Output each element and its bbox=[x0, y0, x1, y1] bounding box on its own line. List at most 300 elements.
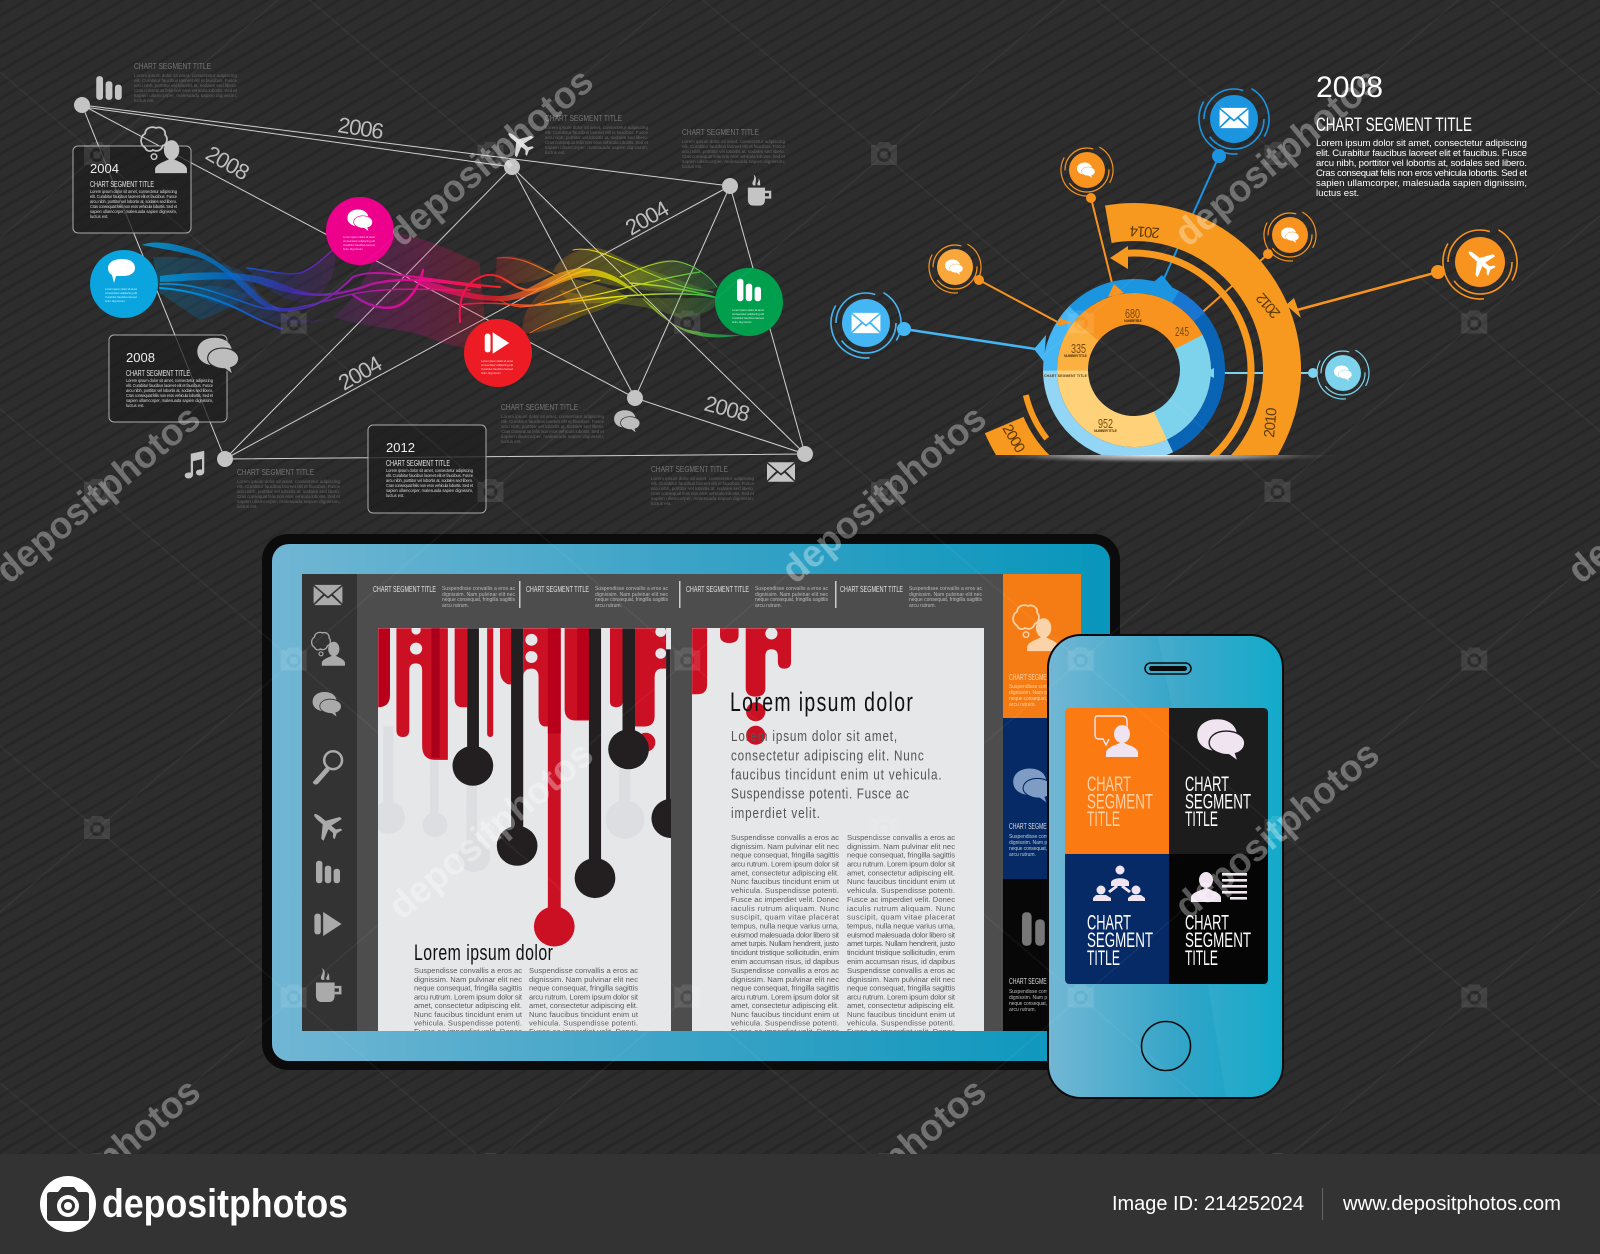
phone tile: orange: SEGMENT bbox=[1087, 791, 1153, 814]
tablet screen bbox=[302, 574, 1081, 1031]
donut value labels: 952 bbox=[1098, 416, 1113, 431]
tablet right strip: navy: CHART SEGMENT TITLE bbox=[1009, 822, 1069, 831]
page right body column two: tincidunt tristique sollicitudin, enim bbox=[847, 948, 955, 957]
icon: person with cloud bbox=[1013, 605, 1059, 651]
icon: coffee cup bbox=[748, 174, 771, 206]
phone tile: navy bbox=[1065, 854, 1169, 984]
text block: bottom left: Lorem ipsum dolor sit amet, consectetur adipiscing bbox=[237, 479, 340, 484]
icon: search bbox=[313, 750, 343, 785]
watermark overlay: depositphotos bbox=[381, 733, 602, 928]
text box: 2004: Cras consequat felis non eros vehicula lobortis. Sed et bbox=[90, 204, 178, 209]
phone gloss bbox=[1158, 636, 1282, 1097]
text box: 2012: 2012 bbox=[386, 440, 415, 455]
text block: upper right: CHART SEGMENT TITLE bbox=[682, 128, 759, 137]
text block: bottom left: CHART SEGMENT TITLE bbox=[237, 468, 314, 477]
text block: bottom right: Cras consequat felis non eros vehicula lobortis. Sed et bbox=[651, 491, 755, 496]
text block: top left: sapien ullamcorper, malesuada sapien dignissim, bbox=[134, 93, 237, 98]
circle: red info bubble bbox=[464, 319, 532, 387]
page left body column one: Fusce ac imperdiet velit. Donec bbox=[414, 1027, 522, 1036]
drip artwork right bbox=[692, 628, 791, 745]
donut value labels: 245 bbox=[1175, 324, 1189, 339]
circle: blue info bubble: felis dignissim bbox=[105, 299, 126, 303]
website url: www.depositphotos.com bbox=[1342, 1193, 1561, 1215]
icon: chat bbox=[1197, 719, 1245, 761]
text block: top left: CHART SEGMENT TITLE bbox=[134, 62, 211, 71]
text box: 2008: Lorem ipsum dolor sit amet, consectetur adipiscing bbox=[126, 378, 214, 383]
chart heading and description bbox=[1316, 71, 1527, 199]
tablet header segments: neque consequat, fringilla sagittis bbox=[595, 597, 668, 603]
tablet right strip: orange: CHART SEGMENT TITLE bbox=[1009, 673, 1069, 682]
phone tile: orange: CHART bbox=[1087, 773, 1131, 796]
magazine page left bbox=[372, 625, 691, 1036]
text box: 2008: arcu nibh, porttitor vel lobortis at, sodales sed libero. bbox=[126, 388, 213, 393]
circle: green info bubble: consectetur adipiscing elit bbox=[732, 312, 764, 316]
donut value labels: 680 bbox=[1125, 306, 1140, 321]
year labels on lines bbox=[202, 112, 753, 427]
text block: upper middle: elit. Curabitur faucibus laoreet elit et faucibus. Fusce bbox=[545, 130, 648, 135]
network connection lines bbox=[82, 105, 805, 459]
text block: lower middle: luctus est. bbox=[501, 439, 522, 444]
image id: Image ID: 214252024 bbox=[1112, 1193, 1304, 1215]
chart heading and description: sapien ullamcorper, malesuada sapien dignissim, bbox=[1316, 178, 1527, 189]
page right body column one: euismod malesuada dolor libero sit bbox=[731, 930, 840, 939]
page left body column two: vehicula. Suspendisse potenti. bbox=[529, 1019, 638, 1028]
icon: hierarchy people bbox=[1093, 866, 1145, 901]
tablet header segments: arcu rutrum. bbox=[595, 603, 622, 609]
text block: upper right: sapien ullamcorper, malesuada sapien dignissim, bbox=[682, 159, 785, 164]
text block: bottom right: arcu nibh, porttitor vel lobortis at, sodales sed libero. bbox=[651, 486, 754, 491]
text box: 2004: CHART SEGMENT TITLE bbox=[90, 180, 154, 189]
watermark overlay: depositphotos bbox=[381, 60, 602, 255]
chart heading and description: Cras consequat felis non eros vehicula lobortis. Sed et bbox=[1316, 168, 1527, 179]
tablet right strip: black: neque consequat, fringilla sagittis bbox=[1009, 1001, 1080, 1007]
tablet header segments bbox=[373, 581, 982, 609]
text block: upper middle: sapien ullamcorper, malesuada sapien dignissim, bbox=[545, 145, 648, 150]
tablet right strip: orange: arcu rutrum. bbox=[1009, 702, 1036, 708]
tablet right strip: navy: dignissim. Nam pulvinar elit nec bbox=[1009, 840, 1080, 846]
text block: top left bbox=[134, 62, 238, 103]
page right body column two: neque consequat, fringilla sagittis bbox=[847, 851, 955, 860]
page left title: Lorem ipsum dolor bbox=[414, 942, 553, 966]
donut value labels: NUMBER TITLE bbox=[1124, 319, 1143, 323]
tablet header segments: neque consequat, fringilla sagittis bbox=[909, 597, 982, 603]
page right body column one: iaculis rutrum aliquam. Nunc bbox=[731, 904, 839, 913]
icon: bars bbox=[1022, 912, 1058, 946]
tablet right strip: navy: arcu rutrum. bbox=[1009, 852, 1036, 858]
page left body column two: amet, consectetur adipiscing elit. bbox=[529, 1001, 638, 1010]
page right body column two: Fusce ac imperdiet velit. Donec bbox=[847, 895, 955, 904]
page right intro: Lorem ipsum dolor sit amet, bbox=[731, 728, 897, 744]
text block: top left: Lorem ipsum dolor sit amet, consectetur adipiscing bbox=[134, 73, 237, 78]
icon: play bbox=[485, 332, 509, 354]
text box: 2008: elit. Curabitur faucibus laoreet elit et faucibus. Fusce bbox=[126, 383, 214, 388]
icon: cup bbox=[316, 968, 341, 1002]
text block: bottom left: arcu nibh, porttitor vel lobortis at, sodales sed libero. bbox=[237, 489, 340, 494]
icon: chat bubbles large bbox=[197, 338, 239, 375]
page right body column two: Suspendisse convallis a eros ac bbox=[847, 966, 955, 975]
phone tile: black: SEGMENT bbox=[1185, 929, 1251, 952]
text block: upper right: elit. Curabitur faucibus laoreet elit et faucibus. Fusce bbox=[682, 144, 785, 149]
circle: green info bubble: felis dignissim bbox=[732, 320, 752, 324]
circle: red info bubble: consectetur adipiscing elit bbox=[481, 363, 513, 367]
phone tile: dark: SEGMENT bbox=[1185, 791, 1251, 814]
text block: bottom right: luctus est. bbox=[651, 501, 672, 506]
year labels on arcs: 2010 bbox=[1261, 407, 1281, 438]
page left body column two: Suspendisse convallis a eros ac bbox=[529, 966, 638, 975]
tablet header segments: dignissim. Nam pulvinar elit nec bbox=[442, 592, 516, 598]
drip artwork left bbox=[372, 625, 691, 946]
tablet right strip: navy: Suspendisse convallis a eros ac bbox=[1009, 834, 1080, 840]
icon: mail bbox=[1220, 108, 1248, 128]
text box: 2012 bbox=[368, 425, 486, 513]
page left body column two: dignissim. Nam pulvinar elit nec bbox=[529, 975, 638, 984]
page right intro: Suspendisse potenti. Fusce ac bbox=[731, 785, 909, 802]
tablet header segments: arcu rutrum. bbox=[909, 603, 936, 609]
phone tile: navy: TITLE bbox=[1087, 947, 1120, 970]
year labels on arcs: 2000 bbox=[999, 422, 1028, 456]
circle: pink info bubble: Curabitur faucibus laoreet bbox=[343, 243, 375, 247]
text block: upper middle: luctus est. bbox=[545, 150, 566, 155]
tablet right strip: black: Suspendisse convallis a eros ac bbox=[1009, 989, 1080, 995]
text block: lower middle: Lorem ipsum dolor sit amet, consectetur adipiscing bbox=[501, 414, 604, 419]
icon: chat bbox=[1334, 366, 1352, 382]
text box: 2004: arcu nibh, porttitor vel lobortis at, sodales sed libero. bbox=[90, 199, 177, 204]
tablet header segments: arcu rutrum. bbox=[755, 603, 782, 609]
page right body column one: tincidunt tristique sollicitudin, enim bbox=[731, 948, 839, 957]
tablet header segments: neque consequat, fringilla sagittis bbox=[755, 597, 828, 603]
phone tile: dark: TITLE bbox=[1185, 808, 1218, 831]
icon: chat bbox=[347, 210, 373, 232]
circle: red info bubble: Curabitur faucibus laoreet bbox=[481, 367, 513, 371]
text box: 2012: arcu nibh, porttitor vel lobortis at, sodales sed libero. bbox=[386, 478, 473, 483]
phone tile: dark: CHART bbox=[1185, 773, 1229, 796]
page right body column one: dignissim. Nam pulvinar elit nec bbox=[731, 975, 839, 984]
page right body column two: amet, consectetur adipiscing elit. bbox=[847, 868, 955, 877]
text block: top left: Cras consequat felis non eros vehicula lobortis. Sed et bbox=[134, 88, 238, 93]
icon: person and list bbox=[1191, 872, 1247, 902]
icon: person and speech bubble bbox=[1095, 716, 1138, 757]
node: blue mail left bbox=[818, 275, 914, 371]
page left body column two: Nunc faucibus tincidunt enim ut bbox=[529, 1010, 639, 1019]
tablet header segments: neque consequat, fringilla sagittis bbox=[442, 597, 516, 603]
circle: red info bubble: felis dignissim bbox=[481, 371, 502, 375]
network timeline panel bbox=[73, 62, 813, 513]
smartphone mockup bbox=[1048, 635, 1283, 1098]
page right body column one: Fusce ac imperdiet velit. Donec bbox=[731, 1027, 839, 1036]
circle: blue info bubble: consectetur adipiscing elit bbox=[105, 291, 137, 295]
tablet right strip: black bbox=[1003, 879, 1081, 1031]
text box: 2004: sapien ullamcorper, malesuada sapien dignissim, bbox=[90, 209, 177, 214]
icon: bars bbox=[96, 76, 122, 100]
icon: person with cloud bbox=[312, 632, 345, 666]
page right body column two: Nunc faucibus tincidunt enim ut bbox=[847, 1010, 956, 1019]
node: orange chat left bbox=[919, 231, 991, 303]
text block: bottom right: sapien ullamcorper, malesuada sapien dignissim, bbox=[651, 496, 754, 501]
page right body column one bbox=[731, 833, 840, 1036]
tablet header segments: dignissim. Nam pulvinar elit nec bbox=[755, 592, 828, 598]
page left body column one: arcu rutrum. Lorem ipsum dolor sit bbox=[414, 992, 523, 1001]
page right intro bbox=[731, 728, 942, 821]
page left body column two: Fusce ac imperdiet velit. Donec bbox=[529, 1027, 638, 1036]
page left body column one: vehicula. Suspendisse potenti. bbox=[414, 1019, 522, 1028]
page right body column two: amet turpis. Nullam hendrerit, justo bbox=[847, 939, 955, 948]
circle: green info bubble: Lorem ipsum dolor sit amet bbox=[732, 308, 764, 312]
tablet header segments: CHART SEGMENT TITLE bbox=[373, 585, 436, 594]
text box: 2008: 2008 bbox=[126, 350, 155, 365]
text box: 2004: Lorem ipsum dolor sit amet, consectetur adipiscing bbox=[90, 189, 178, 194]
text block: bottom right: CHART SEGMENT TITLE bbox=[651, 465, 728, 474]
watermark overlay: depositphotos bbox=[774, 397, 995, 592]
page right body column two: dignissim. Nam pulvinar elit nec bbox=[847, 842, 955, 851]
page right body column one: vehicula. Suspendisse potenti. bbox=[731, 1019, 839, 1028]
page right body column one: arcu rutrum. Lorem ipsum dolor sit bbox=[731, 860, 840, 868]
circle: pink info bubble: felis dignissim bbox=[343, 247, 364, 251]
page right body column one: suscipit, quam vitae placerat bbox=[731, 913, 840, 922]
year labels on lines: 2008 bbox=[202, 141, 254, 185]
chart heading and description: elit. Curabitur faucibus laoreet elit et faucibus. Fusce bbox=[1316, 148, 1527, 159]
text block: bottom left: elit. Curabitur faucibus laoreet elit et faucibus. Fusce bbox=[237, 484, 340, 489]
circle: blue info bubble bbox=[90, 250, 158, 318]
text block: lower middle: elit. Curabitur faucibus laoreet elit et faucibus. Fusce bbox=[501, 419, 604, 424]
year labels on arcs: 2014 bbox=[1129, 222, 1160, 241]
text block: top left: arcu nibh, porttitor vel lobortis at, sodales sed libero. bbox=[134, 83, 237, 88]
phone tile: black bbox=[1169, 854, 1268, 984]
page right body column one: neque consequat, fringilla sagittis bbox=[731, 984, 839, 992]
page right body column one: tempus, nulla neque varius urna, bbox=[731, 922, 839, 930]
page right body column one: neque consequat, fringilla sagittis bbox=[731, 851, 839, 860]
page right body column two: Fusce ac imperdiet velit. Donec bbox=[847, 1027, 955, 1036]
text box: 2012: Lorem ipsum dolor sit amet, consectetur adipiscing bbox=[386, 468, 474, 473]
icon: mail bbox=[767, 462, 795, 482]
icon: bars bbox=[316, 861, 340, 883]
page left body column one: dignissim. Nam pulvinar elit nec bbox=[414, 975, 522, 984]
radial donut chart panel bbox=[830, 76, 1527, 462]
footer bar bbox=[0, 1154, 1600, 1254]
page right body column two: iaculis rutrum aliquam. Nunc bbox=[847, 904, 955, 913]
icon: plane bbox=[1460, 241, 1501, 282]
footer logo icon bbox=[40, 1176, 96, 1232]
page right body column two: suscipit, quam vitae placerat bbox=[847, 913, 956, 922]
page left body column one: neque consequat, fringilla sagittis bbox=[414, 984, 522, 992]
icon: chat bbox=[313, 692, 341, 718]
text box: 2004 bbox=[73, 146, 191, 233]
page right body column two: tempus, nulla neque varius urna, bbox=[847, 922, 955, 930]
page right intro: faucibus tincidunt enim ut vehicula. bbox=[731, 766, 942, 783]
text block: lower middle: Cras consequat felis non eros vehicula lobortis. Sed et bbox=[501, 429, 605, 434]
text block: bottom left: Cras consequat felis non eros vehicula lobortis. Sed et bbox=[237, 494, 341, 499]
page right intro: consectetur adipiscing elit. Nunc bbox=[731, 747, 924, 764]
page right body column two: dignissim. Nam pulvinar elit nec bbox=[847, 975, 955, 984]
tablet header segments: arcu rutrum. bbox=[442, 603, 469, 609]
circle: blue info bubble: Curabitur faucibus laoreet bbox=[105, 295, 137, 299]
text block: bottom right: elit. Curabitur faucibus laoreet elit et faucibus. Fusce bbox=[651, 481, 754, 486]
icon: chat bbox=[1281, 228, 1299, 244]
text block: top left: elit. Curabitur faucibus laoreet elit et faucibus. Fusce bbox=[134, 78, 237, 83]
tablet header segments: CHART SEGMENT TITLE bbox=[686, 585, 749, 594]
shadow under chart bbox=[975, 455, 1345, 472]
page right body column one: vehicula. Suspendisse potenti. bbox=[731, 886, 839, 895]
donut value labels: 335 bbox=[1071, 341, 1086, 356]
donut value labels: CHART SEGMENT TITLE bbox=[1044, 374, 1088, 378]
year labels on lines: 2004 bbox=[621, 196, 673, 240]
icon: chat bbox=[1077, 162, 1095, 178]
tablet header segments: dignissim. Nam pulvinar elit nec bbox=[909, 592, 982, 598]
tablet right strip: navy: neque consequat, fringilla sagittis bbox=[1009, 846, 1080, 852]
page right body column one: amet, consectetur adipiscing elit. bbox=[731, 1001, 839, 1010]
text box: 2012: CHART SEGMENT TITLE bbox=[386, 459, 450, 468]
icon: chat bubbles small bbox=[614, 410, 640, 433]
node: orange chat right bbox=[1254, 199, 1326, 271]
page right body column one: amet turpis. Nullam hendrerit, justo bbox=[731, 939, 839, 948]
chart heading and description: Lorem ipsum dolor sit amet, consectetur adipiscing bbox=[1316, 138, 1527, 149]
icon: mail bbox=[314, 585, 342, 605]
circle: blue info bubble: Lorem ipsum dolor sit amet bbox=[105, 287, 137, 291]
page right body column two: arcu rutrum. Lorem ipsum dolor sit bbox=[847, 992, 956, 1001]
node: orange chat upper bbox=[1051, 134, 1123, 206]
text box: 2008: CHART SEGMENT TITLE bbox=[126, 369, 190, 378]
circle: pink info bubble bbox=[326, 197, 394, 265]
circle: green info bubble: Curabitur faucibus laoreet bbox=[732, 316, 764, 320]
watermark overlay: depositphotos bbox=[1167, 733, 1388, 928]
text box: 2004: elit. Curabitur faucibus laoreet elit et faucibus. Fusce bbox=[90, 194, 178, 199]
page right title: Lorem ipsum dolor bbox=[730, 687, 913, 717]
tablet right strip: orange: Suspendisse convallis a eros ac bbox=[1009, 684, 1080, 690]
text box: 2008: Cras consequat felis non eros vehicula lobortis. Sed et bbox=[126, 393, 214, 398]
tablet header segments: Suspendisse convallis a eros ac bbox=[442, 586, 516, 592]
page right body column two: euismod malesuada dolor libero sit bbox=[847, 930, 956, 939]
network nodes bbox=[74, 97, 813, 467]
text block: lower middle: sapien ullamcorper, malesuada sapien dignissim, bbox=[501, 434, 604, 439]
page right body column one: enim accumsan risus, id dapibus bbox=[731, 957, 839, 966]
text box: 2012: elit. Curabitur faucibus laoreet elit et faucibus. Fusce bbox=[386, 473, 474, 478]
chart heading and description: luctus est. bbox=[1316, 188, 1359, 199]
text block: lower middle: arcu nibh, porttitor vel lobortis at, sodales sed libero. bbox=[501, 424, 604, 429]
icon: play bbox=[314, 912, 342, 936]
phone tile: orange bbox=[1065, 708, 1169, 854]
tablet bezel bbox=[272, 544, 1110, 1061]
phone home button bbox=[1142, 1022, 1190, 1070]
tablet mockup bbox=[262, 534, 1120, 1070]
footer logo wordmark: depositphotos bbox=[102, 1182, 348, 1226]
phone speaker bbox=[1145, 663, 1191, 674]
tablet header segments: CHART SEGMENT TITLE bbox=[840, 585, 903, 594]
text box: 2008: sapien ullamcorper, malesuada sapien dignissim, bbox=[126, 398, 213, 403]
text box: 2012: Cras consequat felis non eros vehicula lobortis. Sed et bbox=[386, 483, 474, 488]
page right body column two: neque consequat, fringilla sagittis bbox=[847, 984, 955, 992]
phone tile: orange: TITLE bbox=[1087, 808, 1120, 831]
tablet right strip: black: CHART SEGMENT TITLE bbox=[1009, 977, 1069, 986]
donut value labels: NUMBER TITLE bbox=[1064, 354, 1088, 358]
icon: person with cloud bbox=[141, 127, 187, 173]
text block: upper right: arcu nibh, porttitor vel lobortis at, sodales sed libero. bbox=[682, 149, 785, 154]
page right body column one: Nunc faucibus tincidunt enim ut bbox=[731, 877, 840, 886]
tablet right strip: navy bbox=[1003, 718, 1081, 879]
tablet header segments: Suspendisse convallis a eros ac bbox=[595, 586, 668, 592]
icon: chat bbox=[1013, 768, 1053, 804]
text block: upper middle: CHART SEGMENT TITLE bbox=[545, 114, 622, 123]
page right body column one: amet, consectetur adipiscing elit. bbox=[731, 868, 839, 877]
text block: upper right: luctus est. bbox=[682, 164, 703, 169]
tablet body bbox=[262, 534, 1120, 1070]
page right body column two: Nunc faucibus tincidunt enim ut bbox=[847, 877, 956, 886]
text block: bottom left: luctus est. bbox=[237, 504, 258, 509]
page left body column one: Suspendisse convallis a eros ac bbox=[414, 966, 522, 975]
year labels on arcs: 2012 bbox=[1253, 289, 1284, 322]
page right body column one: Suspendisse convallis a eros ac bbox=[731, 833, 839, 842]
node: light blue chat bbox=[1307, 337, 1379, 409]
concentric year arcs bbox=[984, 203, 1302, 455]
chart heading and description: CHART SEGMENT TITLE bbox=[1316, 115, 1472, 136]
icon: chat bbox=[945, 260, 963, 276]
connector flares bbox=[1034, 275, 1301, 378]
tablet header segments: Suspendisse convallis a eros ac bbox=[755, 586, 828, 592]
text block: top left: luctus est. bbox=[134, 98, 155, 103]
tablet right strip: orange: neque consequat, fringilla sagittis bbox=[1009, 696, 1080, 702]
node: orange plane bbox=[1429, 211, 1531, 313]
page right body column two: vehicula. Suspendisse potenti. bbox=[847, 1019, 955, 1028]
text box: 2004: 2004 bbox=[90, 161, 119, 176]
circle: pink info bubble: consectetur adipiscing elit bbox=[343, 239, 375, 243]
page right body column one: Nunc faucibus tincidunt enim ut bbox=[731, 1010, 840, 1019]
circle: green info bubble bbox=[715, 268, 783, 336]
rainbow wave ribbon bbox=[142, 233, 742, 348]
phone tile: black: TITLE bbox=[1185, 947, 1218, 970]
text box: 2004: luctus est. bbox=[90, 214, 108, 219]
text block: upper middle: Cras consequat felis non eros vehicula lobortis. Sed et bbox=[545, 140, 649, 145]
circle: red info bubble: Lorem ipsum dolor sit amet bbox=[481, 359, 513, 363]
circle: pink info bubble: Lorem ipsum dolor sit amet bbox=[343, 235, 375, 239]
year labels on lines: 2008 bbox=[702, 391, 753, 427]
donut outer ring bbox=[1043, 279, 1225, 455]
chart connector lines bbox=[904, 156, 1438, 373]
icon: music note bbox=[185, 451, 204, 478]
page right body column two: amet, consectetur adipiscing elit. bbox=[847, 1001, 955, 1010]
text block: upper middle: Lorem ipsum dolor sit amet, consectetur adipiscing bbox=[545, 125, 648, 130]
tablet header segments: CHART SEGMENT TITLE bbox=[526, 585, 589, 594]
tablet header segments: dignissim. Nam pulvinar elit nec bbox=[595, 592, 668, 598]
phone tile: navy: CHART bbox=[1087, 912, 1131, 934]
year labels on arcs bbox=[999, 222, 1284, 456]
tablet right strip: orange bbox=[1003, 574, 1081, 718]
phone tile: navy: SEGMENT bbox=[1087, 929, 1153, 952]
chart heading and description: arcu nibh, porttitor vel lobortis at, sodales sed libero. bbox=[1316, 158, 1527, 169]
text box: 2012: luctus est. bbox=[386, 493, 404, 498]
phone body bbox=[1048, 635, 1283, 1098]
donut inner ring bbox=[1057, 293, 1211, 447]
tablet right strip: black: dignissim. Nam pulvinar elit nec bbox=[1009, 995, 1080, 1001]
icon: bars bbox=[737, 279, 761, 301]
donut value labels: NUMBER TITLE bbox=[1094, 429, 1118, 433]
text block: upper right: Cras consequat felis non eros vehicula lobortis. Sed et bbox=[682, 154, 786, 159]
icon: plane bbox=[500, 123, 539, 162]
tablet sidebar bbox=[302, 574, 357, 1031]
text block: bottom left: sapien ullamcorper, malesuada sapien dignissim, bbox=[237, 499, 340, 504]
magazine page right bbox=[692, 628, 984, 1036]
text box: 2008 bbox=[109, 335, 227, 422]
page right body column two: Suspendisse convallis a eros ac bbox=[847, 833, 955, 842]
icon: chat bbox=[108, 259, 135, 283]
text block: upper middle: arcu nibh, porttitor vel lobortis at, sodales sed libero. bbox=[545, 135, 648, 140]
year labels on lines: 2004 bbox=[334, 351, 386, 395]
text block: upper middle bbox=[545, 114, 649, 155]
icon: plane bbox=[305, 803, 348, 846]
tablet right strip: black: arcu rutrum. bbox=[1009, 1007, 1036, 1013]
watermark overlay: depositphotos bbox=[1167, 60, 1388, 255]
text block: bottom left bbox=[237, 468, 341, 509]
phone tile: black: CHART bbox=[1185, 912, 1229, 934]
page right body column two: enim accumsan risus, id dapibus bbox=[847, 957, 955, 966]
text block: lower middle: CHART SEGMENT TITLE bbox=[501, 403, 578, 412]
